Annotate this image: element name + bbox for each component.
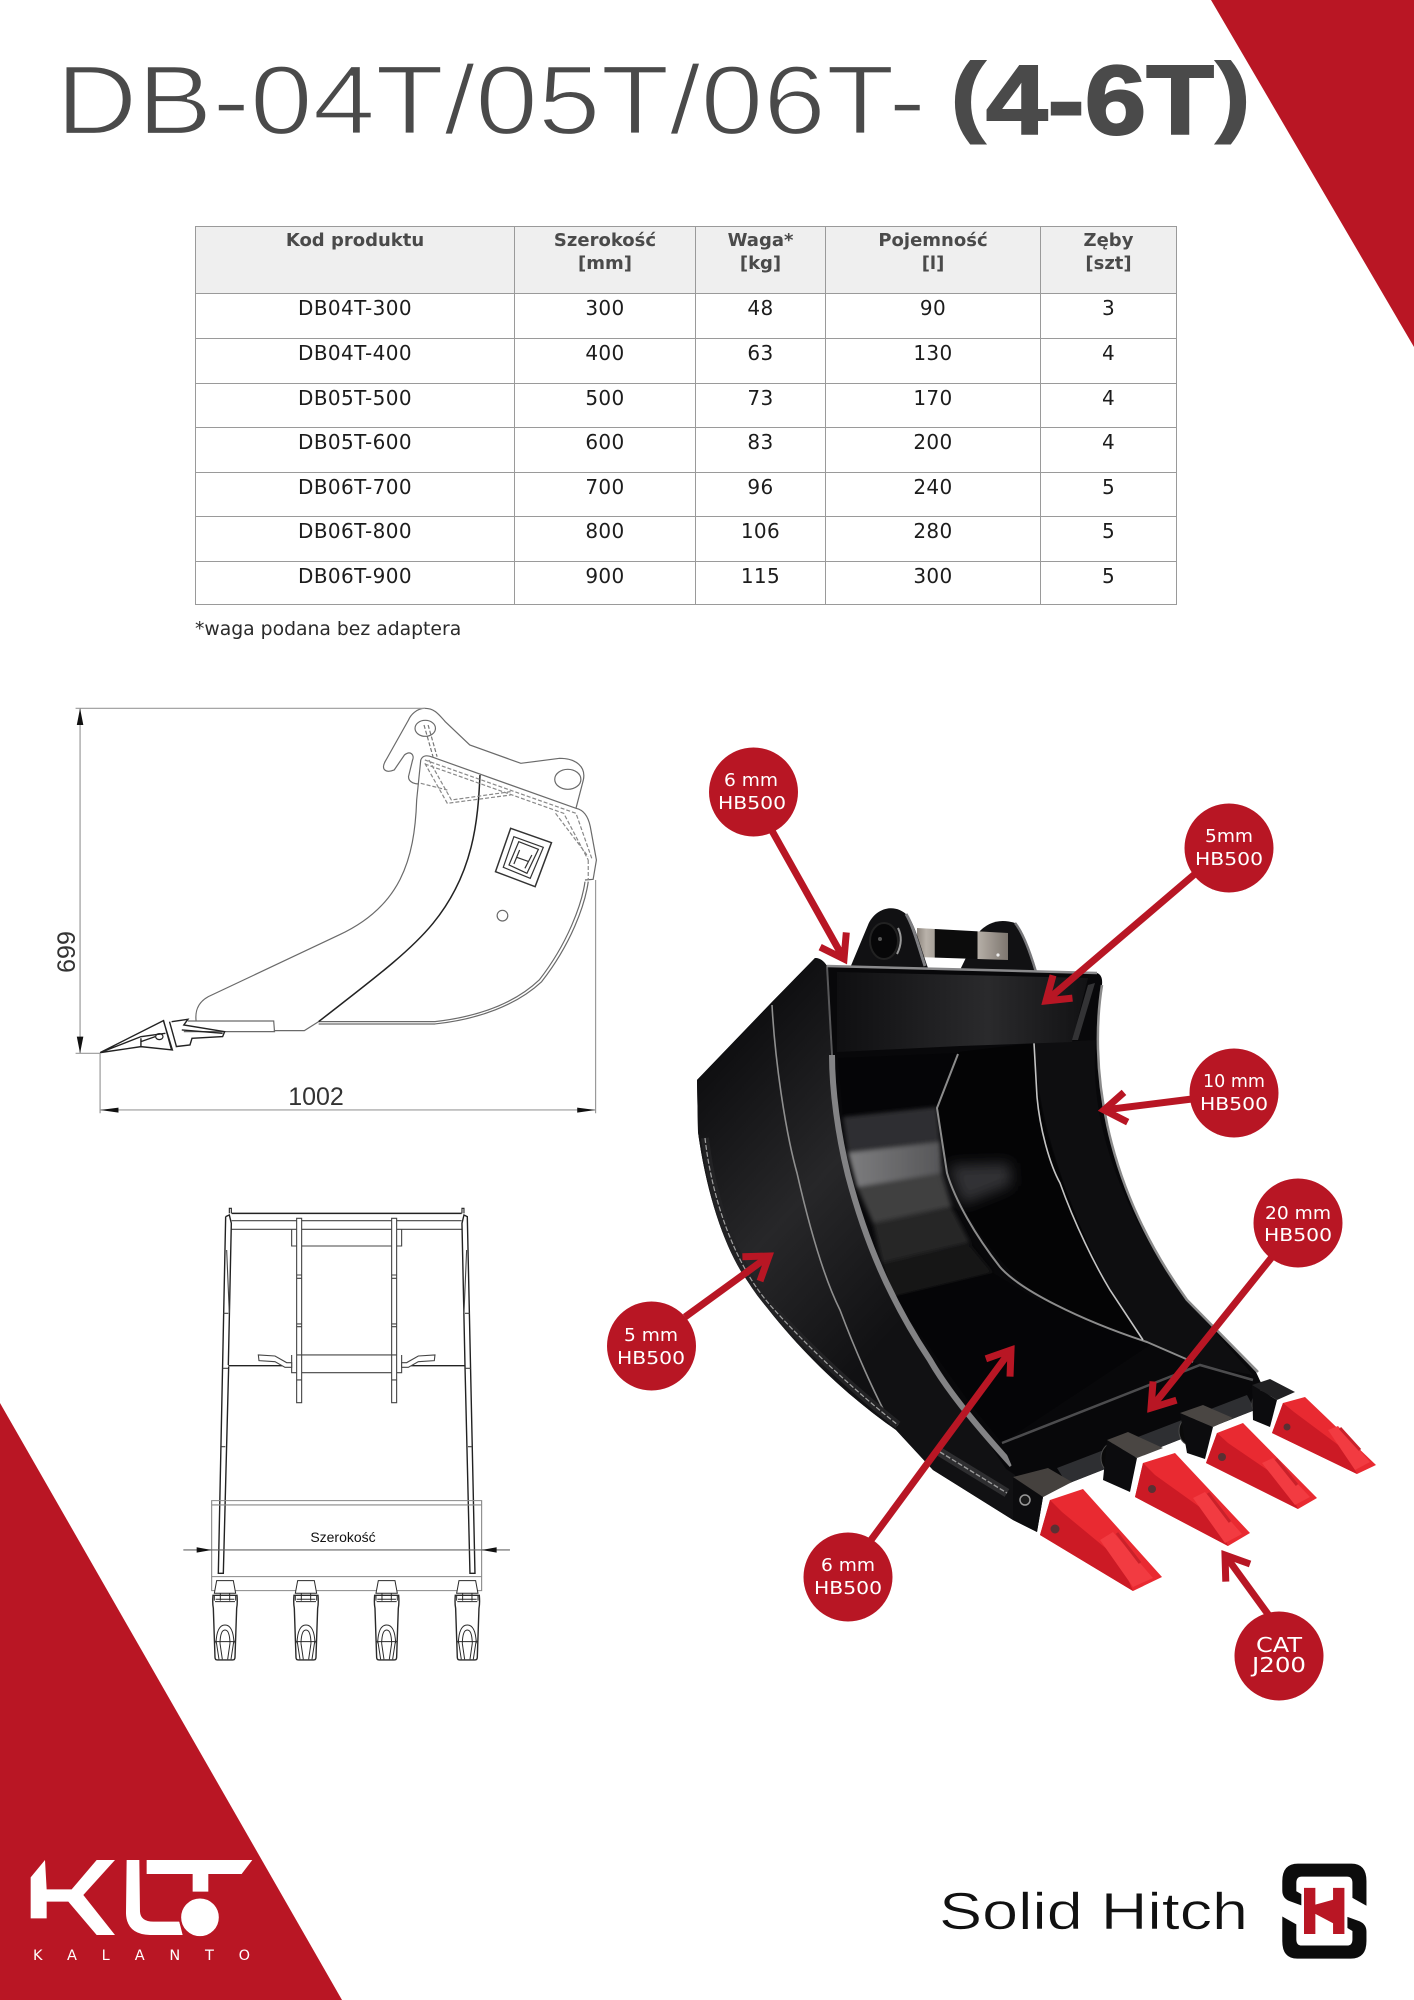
callout: CAT J200: CAT	[1256, 1633, 1303, 1657]
red tooth 1	[1040, 1489, 1162, 1591]
callout: 6 mm HB500 bottom	[804, 1532, 892, 1622]
left rim	[827, 966, 1012, 1465]
specification table: 4	[1102, 341, 1115, 365]
right rim	[1098, 985, 1258, 1372]
specification table: 700	[585, 475, 625, 499]
callout: CAT J200	[1234, 1612, 1324, 1700]
specification table: 90	[920, 296, 946, 320]
callout: 5mm HB500: 5mm	[1205, 826, 1253, 847]
specification table: 800	[585, 519, 625, 543]
callout: 6 mm HB500 top: HB500	[718, 793, 786, 814]
specification table: 4	[1102, 386, 1115, 410]
callout: 10 mm HB500: HB500	[1200, 1094, 1268, 1115]
corner triangle: bottom left	[0, 1403, 342, 2000]
specification table: Kod produktu	[286, 230, 424, 251]
specification table: [kg]	[740, 253, 781, 274]
specification table: 300	[585, 296, 625, 320]
specification table: DB06T-800	[298, 519, 412, 543]
callout: 5mm HB500	[1184, 804, 1274, 892]
specification table: Waga*	[728, 230, 793, 251]
specification table: 4	[1102, 430, 1115, 454]
specification table: 280	[913, 519, 953, 543]
callout: 5mm HB500: HB500	[1195, 849, 1263, 870]
dimension: height: 699	[53, 931, 81, 973]
logo: Solid Hitch: Solid Hitch	[939, 1883, 1248, 1941]
callout: 5 mm HB500 left: 5 mm	[624, 1325, 678, 1346]
specification table: Szerokość	[554, 230, 656, 251]
specification table: 130	[913, 341, 953, 365]
specification table: 3	[1102, 296, 1115, 320]
callout: 10 mm HB500: 10 mm	[1203, 1071, 1265, 1092]
specification table: 400	[585, 341, 625, 365]
specification table: DB06T-700	[298, 475, 412, 499]
hitch ears and pin	[850, 908, 1037, 972]
callout: 6 mm HB500 top	[709, 748, 798, 836]
front lip plate	[1002, 1365, 1253, 1478]
corner triangle: top right	[1211, 0, 1414, 347]
callout: 6 mm HB500 top: 6 mm	[724, 770, 778, 791]
side view technical drawing	[53, 708, 596, 1113]
callout: 5 mm HB500 left: HB500	[617, 1348, 685, 1369]
title: DB-04T/05T/06T-	[56, 45, 926, 155]
arrow: floor	[871, 1350, 1011, 1540]
specification table: DB06T-900	[298, 564, 412, 588]
specification table: 106	[741, 519, 780, 543]
front view technical drawing	[183, 1208, 510, 1660]
red tooth 4	[1272, 1397, 1376, 1474]
specification table: 73	[747, 386, 774, 410]
specification table: 200	[913, 430, 953, 454]
specification table: 48	[747, 296, 774, 320]
title: 4-6T	[986, 45, 1214, 155]
width label: Szerokość	[310, 1529, 376, 1545]
top plate	[827, 966, 1097, 1052]
logo: KLT Kalanto	[31, 1860, 252, 1964]
callout: CAT J200: J200	[1250, 1653, 1306, 1677]
bucket photo illustration	[697, 908, 1376, 1591]
callout: 6 mm HB500 bottom: HB500	[814, 1578, 882, 1599]
logo: Solid Hitch	[939, 1864, 1366, 1959]
table footnote: *waga podana bez adaptera	[195, 619, 461, 640]
callout: 5 mm HB500 left	[607, 1302, 696, 1390]
specification table: 63	[747, 341, 774, 365]
dimension lines	[76, 708, 596, 1113]
specification table: 115	[741, 564, 780, 588]
callout: 20 mm HB500	[1254, 1178, 1342, 1268]
specification table: 83	[747, 430, 774, 454]
callout: 10 mm HB500	[1190, 1048, 1278, 1138]
specification table: [szt]	[1085, 253, 1132, 274]
bucket body silhouette	[697, 958, 1262, 1532]
title	[56, 45, 1250, 155]
adapters	[1013, 1379, 1295, 1532]
interior right walls	[937, 1040, 1253, 1375]
red tooth 3	[1206, 1423, 1317, 1509]
specification table: 5	[1102, 519, 1115, 543]
specification table: Pojemność	[878, 230, 988, 251]
specification table: 600	[585, 430, 625, 454]
specification table: DB04T-400	[298, 341, 412, 365]
specification table: 96	[747, 475, 774, 499]
specification table: [mm]	[578, 253, 632, 274]
specification table: 5	[1102, 564, 1115, 588]
side plate outer surface	[697, 958, 1015, 1520]
arrow: side plate	[1104, 1099, 1192, 1110]
specification table: 900	[585, 564, 625, 588]
interior back wall bands	[838, 1053, 1150, 1443]
specification table: 240	[913, 475, 953, 499]
specification table: DB05T-600	[298, 430, 412, 454]
specification table: 300	[913, 564, 953, 588]
red tooth 2	[1135, 1453, 1250, 1546]
callout: 20 mm HB500: HB500	[1264, 1225, 1332, 1246]
dimension: length: 1002	[288, 1083, 344, 1111]
specification table: 5	[1102, 475, 1115, 499]
arrow: shell	[685, 1256, 769, 1317]
arrow: top plate	[1046, 873, 1196, 1001]
specification table	[195, 226, 1177, 605]
callout: 6 mm HB500 bottom: 6 mm	[821, 1555, 875, 1576]
specification table: 170	[913, 386, 953, 410]
specification table: DB04T-300	[298, 296, 412, 320]
specification table: 500	[585, 386, 625, 410]
weld seams	[705, 1005, 1193, 1493]
title: (	[951, 45, 986, 144]
specification table: [l]	[922, 253, 944, 274]
arrow: cutting edge	[1151, 1257, 1272, 1408]
specification table: Zęby	[1084, 230, 1133, 251]
title: )	[1216, 45, 1250, 144]
specification table: DB05T-500	[298, 386, 412, 410]
arrow: teeth	[1225, 1555, 1270, 1617]
callout: 20 mm HB500: 20 mm	[1265, 1203, 1331, 1224]
tooth bar	[1057, 1395, 1255, 1484]
arrow: top left plate	[771, 829, 844, 959]
logo: KLT Kalanto: KALANTO	[33, 1948, 250, 1964]
